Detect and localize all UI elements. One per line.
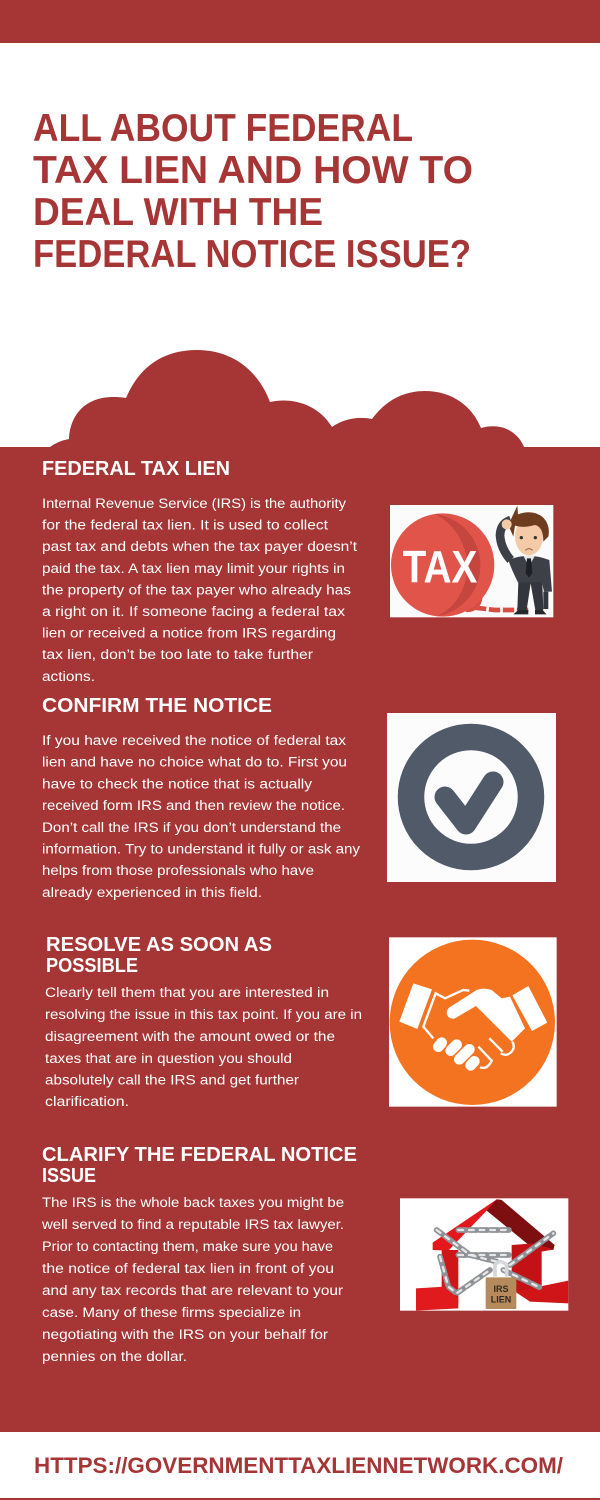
body text: clarify the federal notice issue: pennies on the dollar. [42, 1349, 187, 1365]
body text: confirm the notice: lien and have no choice what do to. First you [42, 755, 347, 771]
body text: federal tax lien: a right on it. If someone facing a federal tax [42, 604, 345, 620]
body text: confirm the notice: received form IRS and then review the notice. [42, 798, 345, 814]
body text: resolve as soon as possible [45, 985, 362, 1110]
section: confirm the notice [42, 694, 361, 901]
body text: clarify the federal notice issue: The IRS is the whole back taxes you might be [42, 1195, 344, 1211]
title: DEAL WITH THE [33, 191, 323, 234]
body text: clarify the federal notice issue [41, 1195, 344, 1365]
body text: federal tax lien: Internal Revenue Service (IRS) is the authority [42, 496, 347, 512]
body text: clarify the federal notice issue: negotiating with the IRS on your behalf for [42, 1327, 328, 1343]
footer url: HTTPS://GOVERNMENTTAXLIENNETWORK.COM/ [34, 1453, 563, 1478]
section: clarify the federal notice issue [41, 1143, 357, 1365]
heading: resolve as soon as possible: POSSIBLE [46, 954, 138, 977]
body text: resolve as soon as possible: taxes that are in question you should [45, 1051, 292, 1067]
body text: confirm the notice: information. Try to understand it fully or ask any [42, 842, 361, 858]
image: tax ball and worried man: TAX [403, 541, 477, 592]
body text: resolve as soon as possible: Clearly tell them that you are interested in [45, 985, 329, 1001]
body text: clarify the federal notice issue: and any tax records that are relevant to your [42, 1283, 343, 1299]
body text: resolve as soon as possible: absolutely call the IRS and get further [45, 1072, 299, 1088]
body text: clarify the federal notice issue: the notice of federal tax lien in front of you [42, 1261, 334, 1277]
body text: confirm the notice: Don’t call the IRS if you don’t understand the [42, 820, 341, 836]
body text: confirm the notice: helps from those professionals who have [42, 863, 314, 879]
image: house in chains with padlock [400, 1198, 568, 1311]
heading: resolve as soon as possible [46, 933, 272, 977]
body text: confirm the notice: have to check the notice that is actually [42, 776, 313, 792]
image: house in chains with padlock: LIEN [491, 1294, 511, 1304]
heading: federal tax lien: FEDERAL TAX LIEN [42, 457, 230, 480]
body text: federal tax lien [42, 496, 357, 685]
bottom border [0, 1498, 600, 1500]
heading: resolve as soon as possible: RESOLVE AS SOON AS [46, 933, 272, 956]
main red panel with cloud top [0, 350, 600, 1432]
image: house in chains with padlock: IRS [493, 1284, 508, 1294]
heading: clarify the federal notice issue [42, 1143, 357, 1187]
body text: confirm the notice [42, 733, 361, 901]
body text: federal tax lien: for the federal tax lien. It is used to collect [42, 518, 328, 534]
section: federal tax lien [42, 457, 357, 685]
body text: resolve as soon as possible: resolving the issue in this tax point. If you are in [45, 1007, 362, 1023]
title: FEDERAL NOTICE ISSUE? [33, 233, 471, 276]
top banner [0, 0, 600, 43]
image: tax ball and worried man [390, 505, 553, 617]
body text: clarify the federal notice issue: case. Many of these firms specialize in [42, 1305, 301, 1321]
body text: federal tax lien: past tax and debts when the tax payer doesn’t [42, 539, 357, 555]
body text: federal tax lien: the property of the tax payer who already has [42, 582, 351, 598]
body text: federal tax lien: paid the tax. A tax lien may limit your rights in [42, 561, 345, 577]
body text: confirm the notice: already experienced in this field. [42, 885, 262, 901]
heading: clarify the federal notice issue: CLARIFY THE FEDERAL NOTICE [42, 1143, 357, 1166]
body text: resolve as soon as possible: clarification. [45, 1094, 129, 1110]
heading: confirm the notice: CONFIRM THE NOTICE [42, 694, 272, 717]
title [33, 107, 473, 276]
body text: confirm the notice: If you have received the notice of federal tax [42, 733, 346, 749]
body text: federal tax lien: actions. [42, 669, 95, 685]
body text: clarify the federal notice issue: well served to find a reputable IRS tax lawyer. [41, 1217, 344, 1233]
body text: clarify the federal notice issue: Prior to contacting them, make sure you have [42, 1239, 333, 1255]
title: TAX LIEN AND HOW TO [33, 149, 473, 192]
body text: federal tax lien: lien or received a notice from IRS regarding [42, 626, 336, 642]
body text: federal tax lien: tax lien, don’t be too late to take further [42, 647, 313, 663]
section: resolve as soon as possible [45, 933, 362, 1110]
image: handshake [389, 937, 557, 1107]
title: ALL ABOUT FEDERAL [33, 107, 413, 150]
heading: clarify the federal notice issue: ISSUE [42, 1164, 96, 1187]
body text: resolve as soon as possible: disagreement with the amount owed or the [45, 1029, 335, 1045]
image: check mark [387, 713, 556, 882]
